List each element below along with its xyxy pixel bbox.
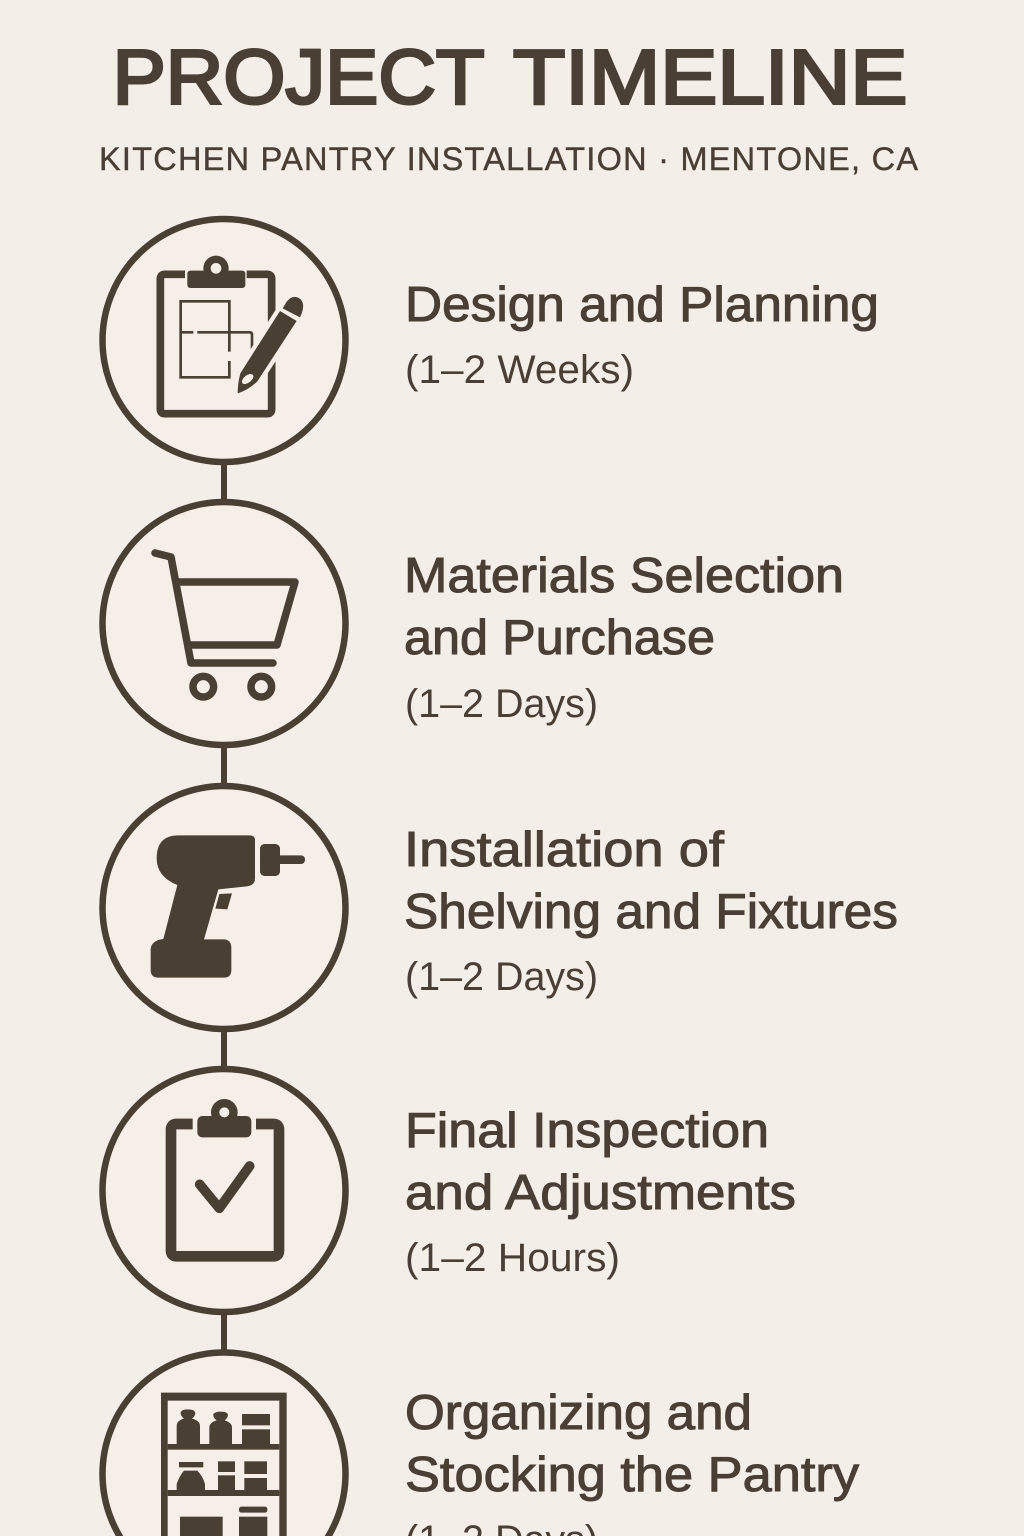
step 3 heading: Shelving and Fixtures bbox=[404, 885, 898, 939]
step 3: installation of shelving and fixtures bbox=[102, 786, 898, 1029]
subtitle: KITCHEN PANTRY INSTALLATION · MENTONE, CA bbox=[99, 141, 918, 177]
step 3 heading bbox=[404, 823, 898, 939]
step 1 circle bbox=[102, 219, 346, 462]
step 2: materials selection and purchase bbox=[102, 502, 844, 745]
title: TIMELINE bbox=[513, 34, 908, 120]
step 5 heading: Stocking the Pantry bbox=[405, 1448, 860, 1502]
icon: clipboard with check mark bbox=[171, 1099, 279, 1256]
title: PROJECT bbox=[113, 34, 485, 120]
step 1: design and planning bbox=[102, 219, 879, 462]
icon: pantry shelves bbox=[161, 1393, 287, 1536]
step 2 heading: Materials Selection bbox=[404, 549, 844, 603]
step 1 duration: (1–2 Weeks) bbox=[405, 348, 634, 392]
step 5: organizing and stocking the pantry bbox=[102, 1352, 860, 1536]
step 4 circle bbox=[102, 1069, 346, 1312]
icon: power drill bbox=[151, 835, 305, 978]
connectors between steps bbox=[221, 463, 227, 1352]
step 5 heading: Organizing and bbox=[405, 1386, 752, 1440]
step 2 heading bbox=[404, 549, 844, 665]
step 4 heading: and Adjustments bbox=[405, 1166, 796, 1220]
icon: clipboard with floor plan and pencil bbox=[160, 256, 303, 414]
step 3 heading: Installation of bbox=[404, 823, 724, 877]
step 5 heading bbox=[405, 1386, 860, 1502]
step 2 circle bbox=[102, 502, 346, 745]
step 1 heading: Design and Planning bbox=[405, 278, 879, 332]
step 2 duration: (1–2 Days) bbox=[405, 682, 598, 726]
title bbox=[113, 34, 908, 120]
step 2 heading: and Purchase bbox=[404, 611, 715, 665]
step 5 circle bbox=[102, 1352, 346, 1536]
step 4 duration: (1–2 Hours) bbox=[405, 1236, 620, 1280]
step 4 heading bbox=[405, 1104, 796, 1220]
step 4 heading: Final Inspection bbox=[405, 1104, 769, 1158]
step 3 circle bbox=[102, 786, 346, 1029]
step 4: final inspection and adjustments bbox=[102, 1069, 796, 1312]
step 3 duration: (1–2 Days) bbox=[405, 955, 598, 999]
icon: shopping cart bbox=[155, 553, 295, 697]
